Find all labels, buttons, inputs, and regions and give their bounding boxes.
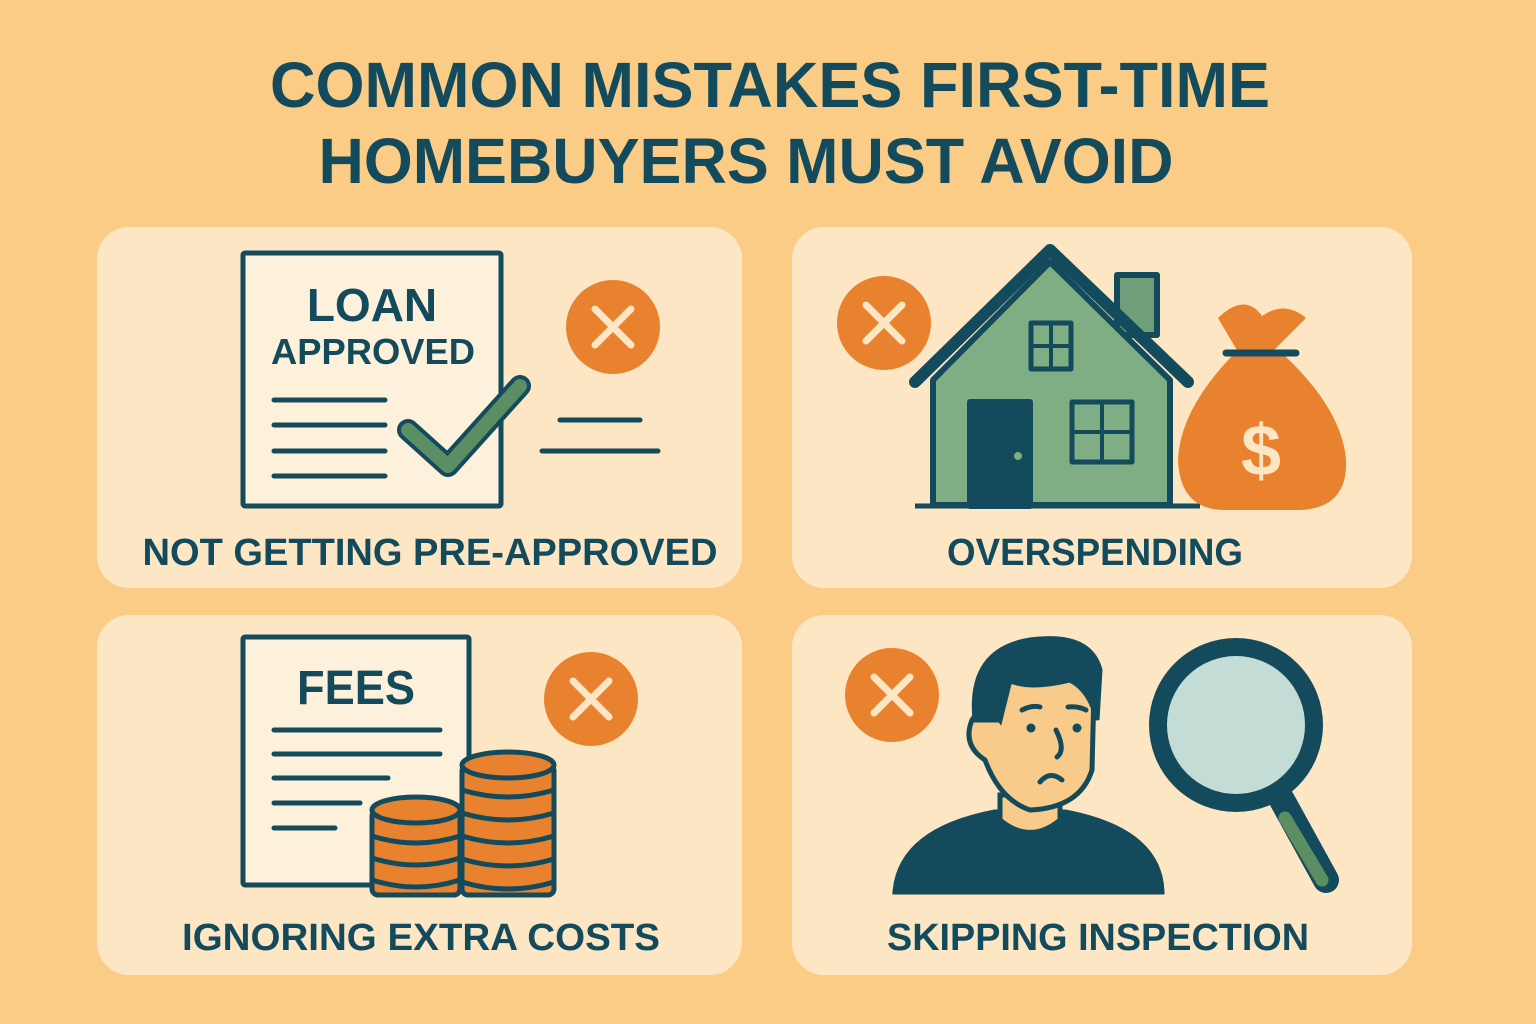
icon: money bag: $ [1241, 411, 1281, 491]
panel: overspending [792, 227, 1412, 588]
icon: x mark [566, 280, 660, 374]
panel: ignoring extra costs [97, 615, 742, 975]
icon: x mark [837, 276, 931, 370]
icon: loan document: LOAN [307, 279, 437, 331]
icon: loan document: APPROVED [271, 331, 475, 372]
icon: worried person [895, 639, 1162, 892]
icon: fees document: FEES [297, 662, 415, 715]
label: SKIPPING INSPECTION [887, 917, 1309, 959]
title: COMMON MISTAKES FIRST-TIME [270, 49, 1270, 121]
label: OVERSPENDING [947, 532, 1243, 574]
title: HOMEBUYERS MUST AVOID [318, 125, 1174, 197]
title [270, 49, 1270, 197]
icon: coins [372, 752, 554, 895]
panel: skipping inspection [792, 615, 1412, 975]
icon: fees document [243, 637, 469, 885]
icon: money bag [1178, 304, 1346, 510]
label: IGNORING EXTRA COSTS [182, 917, 660, 959]
icon: x mark [845, 648, 939, 742]
icon: loan document [243, 253, 658, 506]
icon: x mark [544, 652, 638, 746]
icon: magnifying glass [1158, 647, 1326, 880]
icon: house [915, 250, 1200, 506]
panel: not getting pre-approved [97, 227, 742, 588]
label: NOT GETTING PRE-APPROVED [142, 532, 718, 574]
